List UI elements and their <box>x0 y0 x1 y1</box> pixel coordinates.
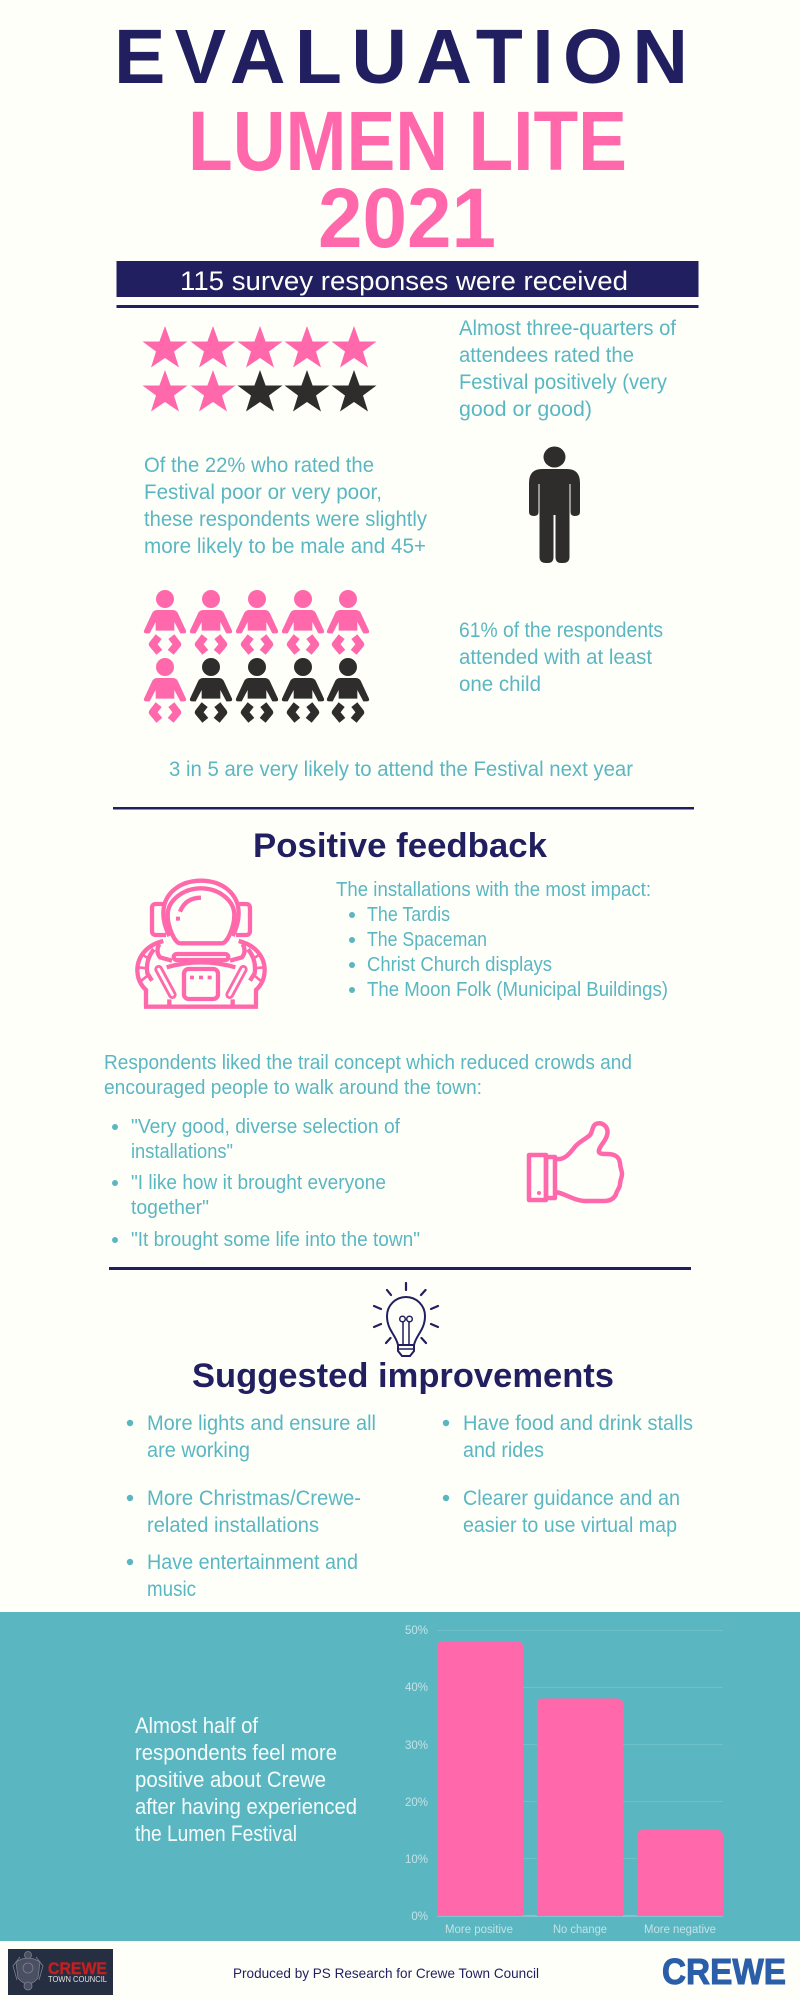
list: improvements right: and rides <box>463 1439 544 1462</box>
text: poor ratings: Of the 22% who rated the <box>144 454 374 477</box>
list: quotes: "Very good, diverse selection of <box>131 1116 400 1138</box>
panel: perception of Crewe <box>0 1612 800 1941</box>
icon: light bulb <box>374 1283 438 1356</box>
bar chart: 50% <box>405 1625 428 1637</box>
list: installations with most impact: The Tardis <box>367 904 450 926</box>
text: more positive about Crewe: positive about Crewe <box>135 1767 326 1792</box>
list: improvements left <box>127 1412 376 1601</box>
title: Lumen Lite: LUMEN LITE <box>188 94 627 188</box>
logo: Crewe Town Council: CREWE <box>48 1960 107 1978</box>
list: quotes: "It brought some life into the town" <box>131 1229 420 1251</box>
list: improvements right: easier to use virtual map <box>463 1514 677 1537</box>
bar chart: More positive <box>445 1924 513 1936</box>
list: installations with most impact <box>336 879 668 1001</box>
icon: thumbs up <box>529 1123 622 1201</box>
list: quotes: together" <box>131 1197 209 1219</box>
text: attended with child: 61% of the respondents <box>459 619 663 642</box>
bar chart: No change <box>553 1924 607 1936</box>
bar chart: 20% <box>405 1797 428 1809</box>
text: attended with child: attended with at least <box>459 646 652 669</box>
list: improvements left: More Christmas/Crewe- <box>147 1487 361 1510</box>
bar chart: 10% <box>405 1854 428 1866</box>
text: trail concept <box>104 1052 632 1099</box>
icon: star rating <box>142 326 376 412</box>
title: 2021: 2021 <box>318 171 496 265</box>
logo: Crewe: CREWE <box>662 1951 786 1992</box>
text: more positive about Crewe: after having experienced <box>135 1794 357 1819</box>
list: improvements right: Clearer guidance and an <box>463 1487 680 1510</box>
list: improvements right <box>443 1412 693 1537</box>
text: positive rating: Festival positively (very <box>459 371 667 394</box>
list: improvements left: Have entertainment and <box>147 1551 358 1574</box>
bar chart: 0% <box>411 1911 428 1923</box>
text: poor ratings: Festival poor or very poor, <box>144 481 382 504</box>
list: quotes <box>112 1116 420 1251</box>
text: positive rating: Almost three-quarters of <box>459 317 676 340</box>
list: installations with most impact: The installations with the most impact: <box>336 879 651 901</box>
text: likely to attend: 3 in 5 are very likely to attend the Festival next year <box>169 758 633 781</box>
list: improvements left: music <box>147 1578 196 1601</box>
list: installations with most impact: The Spaceman <box>367 929 487 951</box>
list: installations with most impact: Christ Church displays <box>367 954 552 976</box>
text: attended with child: one child <box>459 673 541 696</box>
text: attended with child <box>459 619 663 696</box>
text: more positive about Crewe <box>135 1713 357 1846</box>
text: positive rating: good or good) <box>459 398 592 421</box>
list: improvements left: related installations <box>147 1514 319 1537</box>
bar chart <box>405 1625 723 1936</box>
title: Evaluation: EVALUATION <box>114 14 688 100</box>
text: poor ratings <box>144 454 427 558</box>
list: improvements right: Have food and drink stalls <box>463 1412 693 1435</box>
credit line: Produced by PS Research for Crewe Town Council <box>233 1965 539 1981</box>
bar chart: 40% <box>405 1682 428 1694</box>
text: trail concept: Respondents liked the trail concept which reduced crowds and <box>104 1052 632 1074</box>
logo: Crewe Town Council: TOWN COUNCIL <box>48 1975 108 1984</box>
list: quotes: installations" <box>131 1141 233 1163</box>
text: poor ratings: these respondents were slightly <box>144 508 427 531</box>
logo: Crewe Town Council <box>8 1949 113 1995</box>
text: more positive about Crewe: respondents feel more <box>135 1740 337 1765</box>
bar chart: 30% <box>405 1740 428 1752</box>
bar chart: More negative <box>644 1924 716 1936</box>
list: quotes: "I like how it brought everyone <box>131 1172 386 1194</box>
text: positive rating <box>459 317 676 421</box>
list: improvements left: More lights and ensure all <box>147 1412 376 1435</box>
icon: astronaut <box>137 881 265 1007</box>
list: installations with most impact: The Moon Folk (Municipal Buildings) <box>367 979 668 1001</box>
text: more positive about Crewe: Almost half of <box>135 1713 259 1738</box>
text: positive rating: attendees rated the <box>459 344 634 367</box>
text: more positive about Crewe: the Lumen Festival <box>135 1821 297 1846</box>
text: poor ratings: more likely to be male and 45+ <box>144 535 426 558</box>
icon: children pictogram <box>144 590 369 720</box>
banner: survey responses <box>116 261 698 297</box>
banner: survey responses: 115 survey responses were received <box>180 266 628 296</box>
icon: man <box>529 446 580 563</box>
list: improvements left: are working <box>147 1439 250 1462</box>
heading: positive feedback: Positive feedback <box>253 827 547 865</box>
text: trail concept: encouraged people to walk around the town: <box>104 1077 482 1099</box>
heading: suggested improvements: Suggested improvements <box>192 1357 614 1395</box>
